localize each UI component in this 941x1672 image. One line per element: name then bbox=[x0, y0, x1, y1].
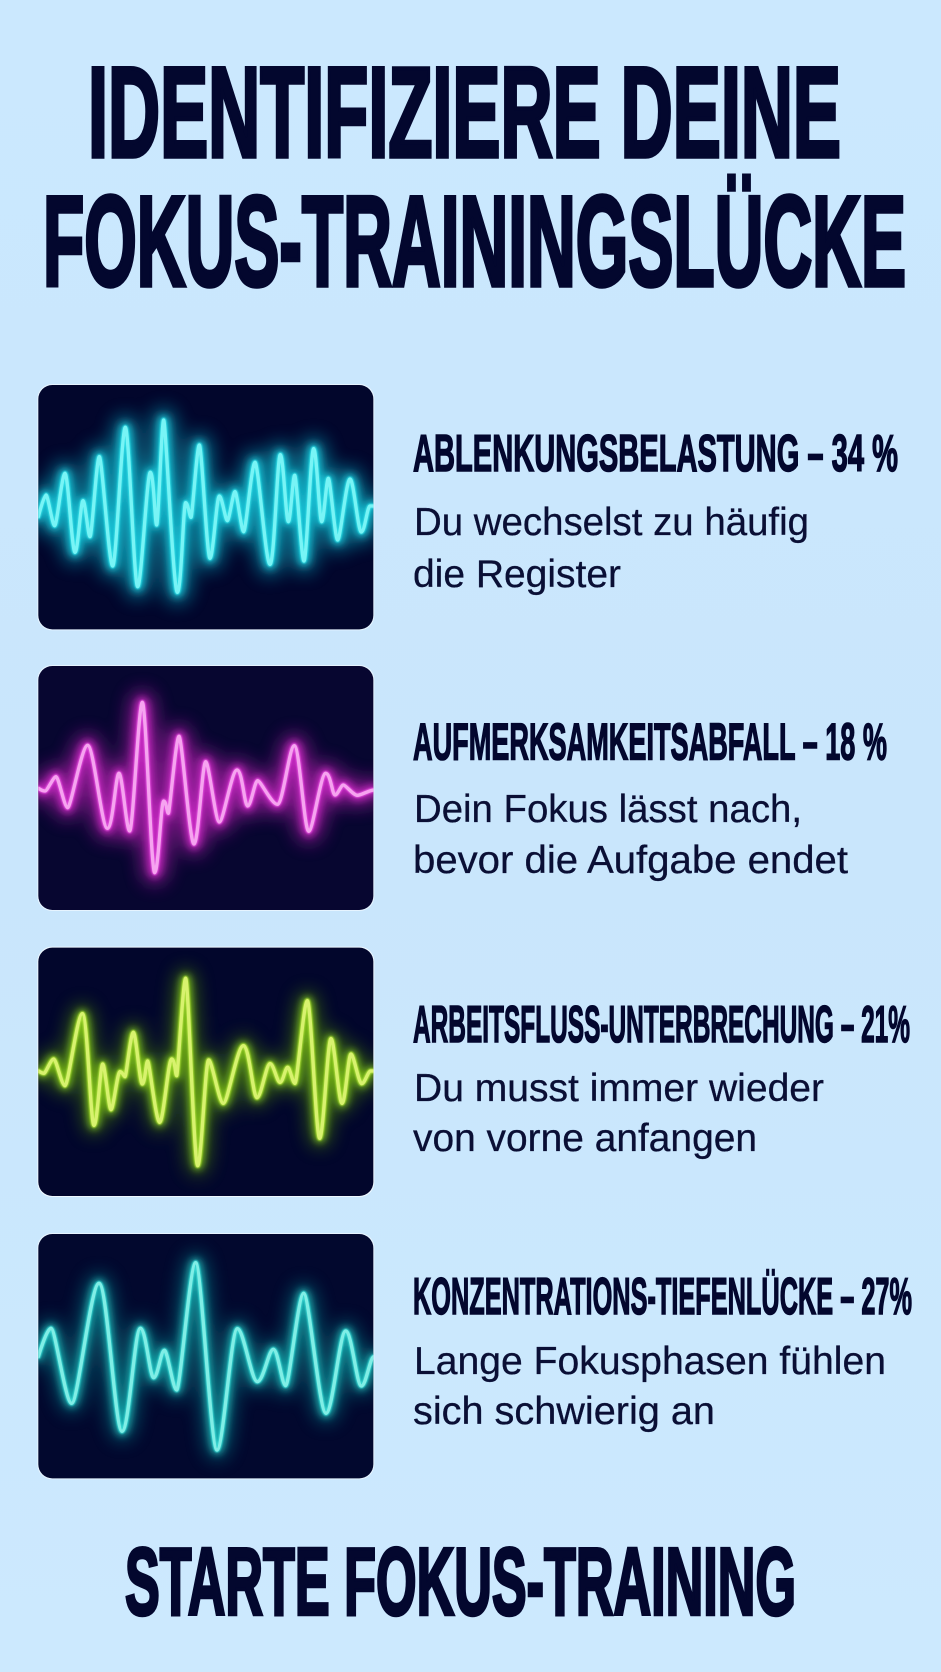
description bbox=[413, 788, 848, 882]
waveform panel: teal bbox=[37, 1233, 374, 1479]
description: Du wechselst zu häufig bbox=[414, 501, 809, 544]
description bbox=[413, 501, 809, 596]
row: Ablenkungsbelastung bbox=[37, 384, 898, 630]
waveform panel: cyan bbox=[37, 384, 374, 630]
row: Aufmerksamkeitsabfall bbox=[37, 665, 887, 911]
row: Konzentrations-Tiefenlücke bbox=[37, 1233, 912, 1479]
description: Du musst immer wieder bbox=[414, 1067, 824, 1110]
waveform panel: magenta bbox=[37, 665, 374, 911]
description: sich schwierig an bbox=[413, 1390, 715, 1433]
row: Arbeitsfluss-Unterbrechung bbox=[37, 947, 910, 1197]
waveform panel: lime bbox=[37, 947, 374, 1197]
title bbox=[43, 42, 906, 314]
description bbox=[413, 1340, 886, 1433]
description: Lange Fokusphasen fühlen bbox=[414, 1340, 886, 1383]
description bbox=[413, 1067, 824, 1160]
description: die Register bbox=[413, 553, 621, 596]
description: bevor die Aufgabe endet bbox=[413, 839, 848, 882]
description: von vorne anfangen bbox=[413, 1117, 757, 1160]
description: Dein Fokus lässt nach, bbox=[414, 788, 802, 831]
